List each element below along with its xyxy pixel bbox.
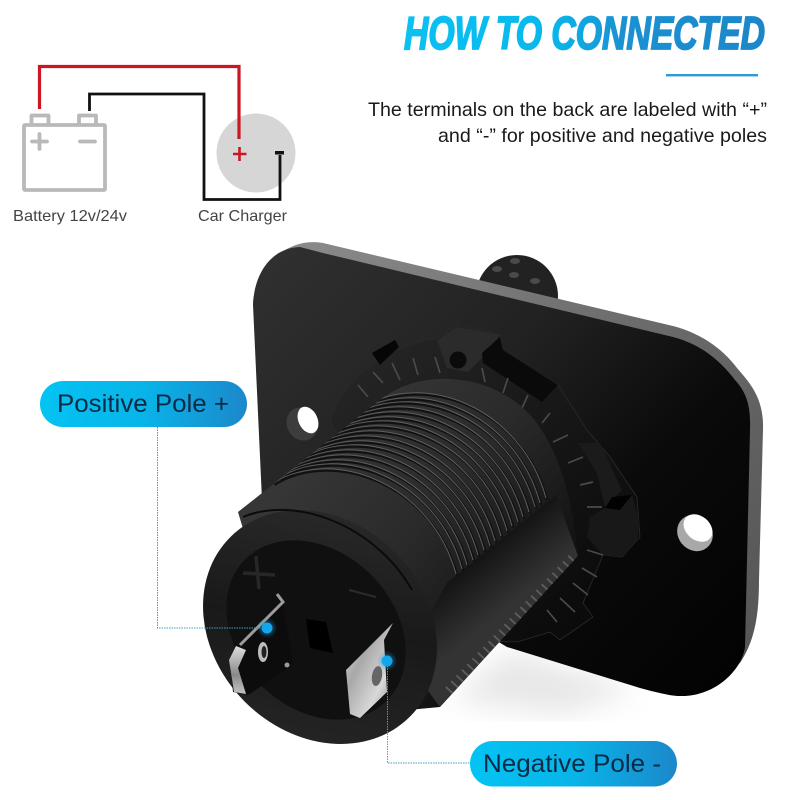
mounting nut behind plate (476, 255, 558, 337)
dark notch (372, 340, 399, 365)
negative terminal blade (346, 623, 393, 718)
description text: and “-” for positive and negative poles (438, 125, 767, 147)
floor shadow (450, 650, 640, 715)
callout: negative pole leader line (388, 661, 470, 763)
embossed minus mark (349, 590, 376, 597)
battery label: Battery 12v/24v (13, 208, 127, 225)
black negative wire (90, 94, 280, 200)
product: socket panel (203, 242, 764, 744)
callout: positive pole (40, 381, 247, 427)
callout: positive pole: Positive Pole + (57, 390, 229, 418)
callout: positive pole leader line (158, 427, 262, 628)
charger plus sign (233, 147, 246, 161)
charger minus sign (275, 151, 284, 154)
right locating block (578, 443, 622, 507)
left mounting hole (281, 402, 323, 446)
flange ring with ticks (330, 325, 640, 642)
square centre hole (306, 619, 333, 653)
mounting plate (253, 242, 763, 696)
right mounting hole (670, 508, 720, 558)
icon: car charger circle (216, 114, 296, 192)
positive terminal marker dot (259, 620, 275, 636)
positive terminal blade (229, 594, 293, 695)
callout: negative pole: Negative Pole - (483, 750, 661, 778)
embossed plus mark (243, 556, 275, 589)
red positive wire (40, 66, 239, 139)
ring ticks (358, 357, 603, 622)
car charger label: Car Charger (198, 208, 288, 225)
icon: battery (24, 116, 105, 190)
callout: negative pole (470, 741, 677, 786)
negative terminal marker dot (379, 653, 395, 669)
wiring diagram (13, 66, 296, 225)
end cap (155, 462, 485, 792)
threaded cylinder (238, 378, 578, 710)
title underline (666, 74, 758, 76)
description text (368, 99, 767, 147)
description text: The terminals on the back are labeled with “+” (368, 99, 767, 121)
top locating block (437, 327, 500, 372)
rear face (190, 504, 442, 756)
